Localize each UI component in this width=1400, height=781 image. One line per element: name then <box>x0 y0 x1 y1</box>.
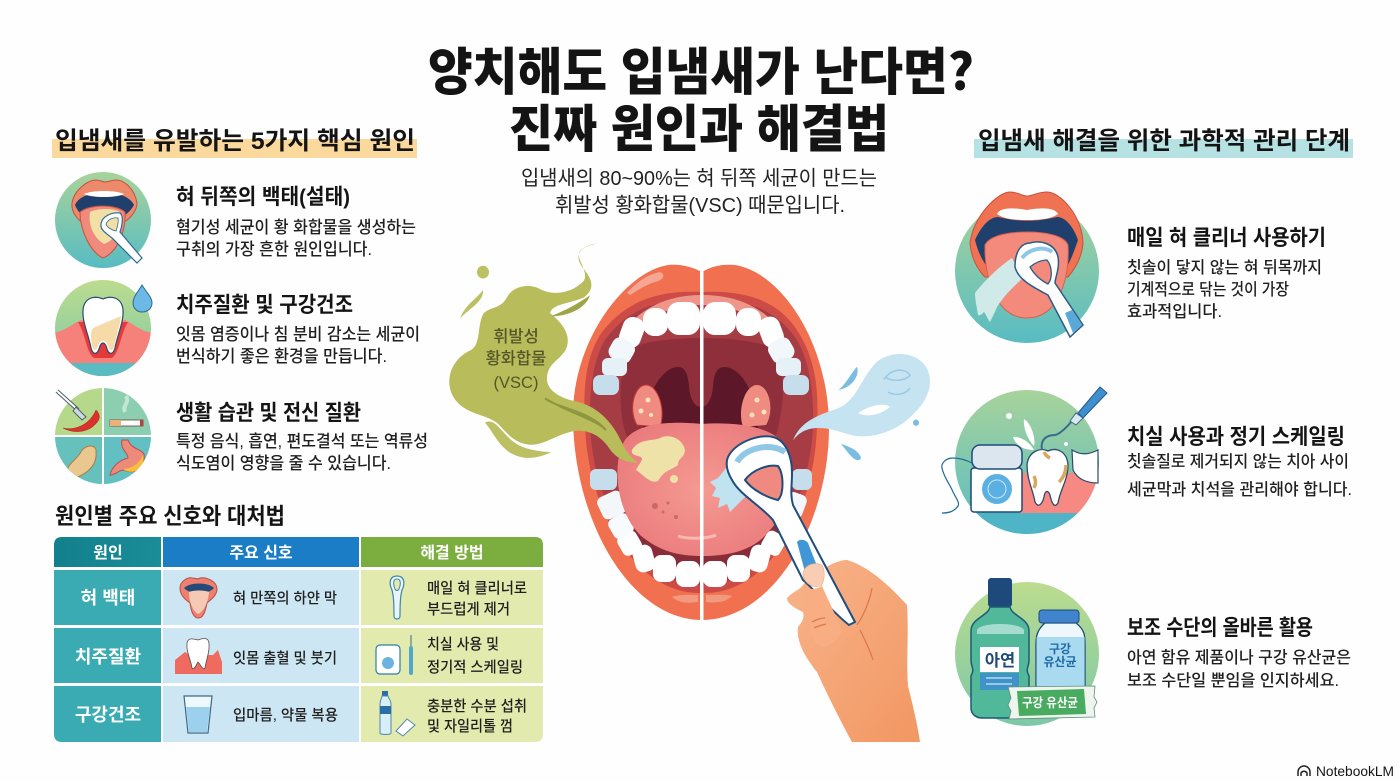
table row: tongue coating: 매일 혀 클리너로 <box>427 580 527 597</box>
panel: step 1: 칫솔이 닿지 않는 혀 뒤목까지 <box>1127 258 1322 277</box>
heading: signal table: 원인별 주요 신호와 대처법 <box>55 504 285 529</box>
table row: gum disease <box>54 628 543 683</box>
table row: gum disease: 치주질환 <box>75 647 142 667</box>
fresh breath swirl <box>793 354 930 460</box>
icon: tongue cleaning <box>955 192 1099 343</box>
table row: dry mouth: 입마름, 약물 복용 <box>233 707 338 724</box>
hand holding cleaner <box>787 560 920 742</box>
panel: causes heading: 입냄새를 유발하는 5가지 핵심 원인 <box>55 127 415 155</box>
panel: step 1 <box>955 192 1326 343</box>
table header: signal: 주요 신호 <box>229 544 293 562</box>
table header: cause <box>54 537 161 567</box>
panel: step 2: 치실 사용과 정기 스케일링 <box>1127 425 1345 449</box>
table row: gum disease: 잇몸 출혈 및 붓기 <box>233 650 337 667</box>
icon: floss and scaling <box>942 387 1107 538</box>
subtitle: 휘발성 황화합물(VSC) 때문입니다. <box>555 194 845 217</box>
odor cloud: volatile sulfur compounds: 휘발성 <box>493 327 539 346</box>
table row: tongue coating: 부드럽게 제거 <box>427 601 510 618</box>
table row: dry mouth <box>54 686 543 742</box>
floor of mouth <box>617 479 787 571</box>
table: causes, signals, solutions <box>54 537 543 742</box>
table row: tongue coating <box>54 570 543 625</box>
table row: dry mouth: 구강건조 <box>75 705 141 725</box>
table row: gum disease: 정기적 스케일링 <box>427 659 523 676</box>
panel: cause 2: 잇몸 염증이나 침 분비 감소는 세균이 <box>176 325 420 344</box>
panel: cause 1: 혐기성 세균이 황 화합물을 생성하는 <box>176 218 416 237</box>
odor cloud: volatile sulfur compounds <box>449 244 638 463</box>
panel: step 3: 아연 함유 제품이나 구강 유산균은 <box>1127 648 1351 667</box>
table header: cause: 원인 <box>93 544 123 562</box>
panel: step 2: 칫솔질로 제거되지 않는 치아 사이 <box>1127 452 1349 471</box>
lip highlights <box>627 272 663 295</box>
odor cloud: volatile sulfur compounds: (VSC) <box>494 374 538 392</box>
table row: tongue coating: 혀 백태 <box>81 588 135 608</box>
odor cloud: volatile sulfur compounds: 황화합물 <box>486 349 546 368</box>
panel: cause 2 <box>50 280 420 380</box>
table row: tongue coating: 혀 만쪽의 하얀 막 <box>233 590 337 607</box>
icon: mouthwash and probiotics: 구강 유산균 <box>1022 696 1078 710</box>
panel: step 2: 세균막과 치석을 관리해야 합니다. <box>1127 480 1352 499</box>
scraped coating <box>710 462 752 512</box>
panel: cause 3: 식도염이 영향을 줄 수 있습니다. <box>176 454 391 473</box>
panel: management heading: 입냄새 해결을 위한 과학적 관리 단계 <box>978 127 1350 155</box>
table header: solution: 해결 방법 <box>420 544 484 562</box>
panel: step 1: 매일 혀 클리너 사용하기 <box>1127 226 1326 250</box>
tool: tongue cleaner <box>727 436 855 647</box>
lower teeth <box>590 469 812 587</box>
table header: signal <box>163 537 359 567</box>
icon: mouthwash and probiotics: 아연 <box>985 651 1015 670</box>
panel: cause 1 <box>55 172 416 268</box>
panel: step 3: 보조 수단의 올바른 활용 <box>1127 616 1313 640</box>
panel: cause 3: 생활 습관 및 전신 질환 <box>176 401 361 425</box>
panel: step 1: 기계적으로 닦는 것이 가장 <box>1127 280 1289 299</box>
icon: mouthwash and probiotics: 구강 <box>1049 642 1071 656</box>
icon: mouthwash and probiotics <box>955 578 1099 726</box>
panel: step 3: 보조 수단일 뿐임을 인지하세요. <box>1127 671 1339 690</box>
panel: cause 1: 구취의 가장 흔한 원인입니다. <box>176 240 372 259</box>
icon: tooth and gums <box>55 280 152 376</box>
throat and uvula <box>633 367 770 430</box>
table row: gum disease: 치실 사용 및 <box>427 636 499 653</box>
panel: cause 1: 혀 뒤쪽의 백태(설태) <box>176 185 350 209</box>
icon: lifestyle quadrants <box>55 388 151 484</box>
table row: dry mouth: 충분한 수분 섭취 <box>427 698 527 715</box>
logo: NotebookLM: NotebookLM <box>1316 763 1394 779</box>
title: 진짜 원인과 해결법 <box>509 88 889 162</box>
icon: mouthwash and probiotics: 유산균 <box>1043 655 1077 669</box>
table row: dry mouth: 및 자일리톨 껌 <box>427 718 513 735</box>
subtitle <box>521 167 877 217</box>
panel: step 1: 효과적입니다. <box>1127 302 1222 321</box>
upper teeth <box>593 302 809 395</box>
panel: step 3 <box>955 578 1351 726</box>
center divider <box>700 268 704 621</box>
panel: cause 2: 번식하기 좋은 환경을 만듭니다. <box>176 347 387 366</box>
table header: solution <box>361 537 543 567</box>
title <box>428 31 974 162</box>
panel: cause 3: 특정 음식, 흡연, 편도결석 또는 역류성 <box>176 432 428 451</box>
panel: step 2 <box>942 387 1352 538</box>
tongue <box>617 423 789 556</box>
panel: cause 2: 치주질환 및 구강건조 <box>176 293 353 317</box>
subtitle: 입냄새의 80~90%는 혀 뒤쪽 세균이 만드는 <box>521 167 877 190</box>
panel: cause 3 <box>55 388 428 484</box>
tongue coating <box>632 436 685 482</box>
title: 양치해도 입냄새가 난다면? <box>428 31 974 105</box>
illustration: open mouth <box>573 265 829 621</box>
icon: coated tongue <box>55 172 151 268</box>
